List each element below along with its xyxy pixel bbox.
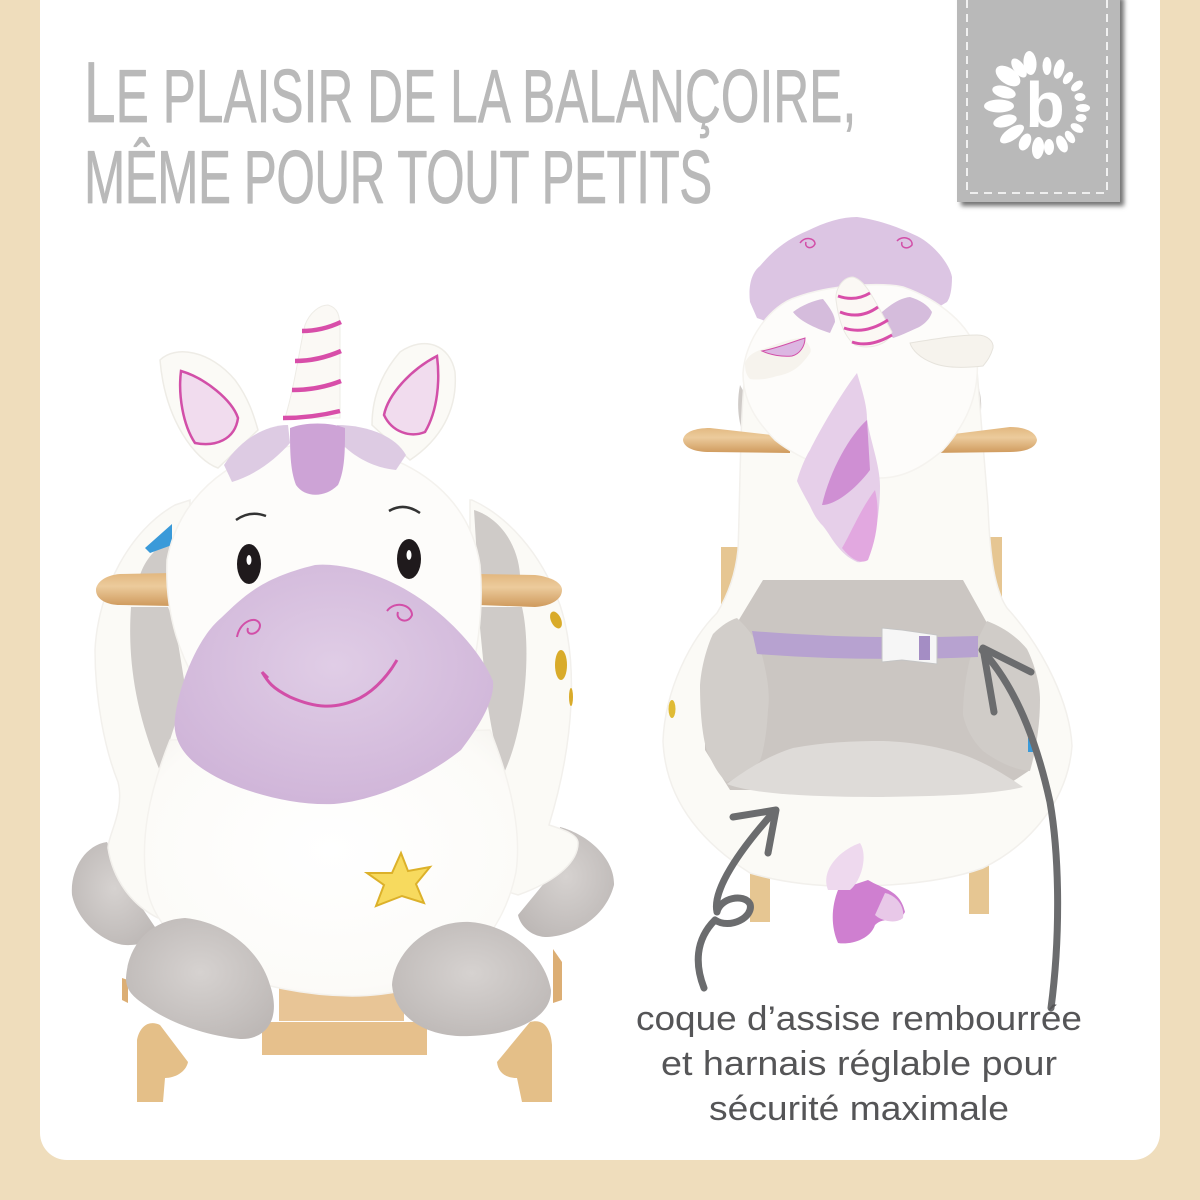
caption xyxy=(636,1000,1082,1128)
icon: flower logo xyxy=(984,50,1090,159)
yellow and blue spots xyxy=(668,700,1033,752)
inner seat grey xyxy=(130,510,526,775)
chair legs xyxy=(721,537,1002,922)
head xyxy=(167,445,481,680)
front feet xyxy=(126,918,551,1039)
forelock xyxy=(224,424,406,495)
harness xyxy=(752,628,978,664)
muzzle xyxy=(175,565,493,804)
illustration: back view unicorn xyxy=(663,217,1072,943)
horn xyxy=(283,305,341,418)
ears xyxy=(745,335,993,380)
illustration: front view unicorn xyxy=(72,305,614,1102)
inner seat xyxy=(700,580,1040,797)
ears xyxy=(160,344,455,468)
arrow: to harness xyxy=(982,648,1058,1008)
body xyxy=(144,730,518,996)
rocking base xyxy=(122,949,562,1102)
caption: sécurité maximale xyxy=(709,1090,1009,1128)
title xyxy=(84,45,856,220)
wooden handles xyxy=(96,573,562,607)
wooden handle xyxy=(683,427,1037,453)
title: LE PLAISIR DE LA BALANÇOIRE, xyxy=(84,45,856,141)
mane xyxy=(797,373,880,562)
logo tag xyxy=(957,0,1120,202)
star xyxy=(367,853,430,906)
caption: coque d’assise rembourrée xyxy=(636,1000,1082,1038)
tail xyxy=(826,843,905,943)
eyes xyxy=(236,507,421,584)
forelock xyxy=(793,297,932,338)
horn xyxy=(836,277,892,347)
yellow dots xyxy=(548,610,573,706)
grey behind head xyxy=(738,385,981,450)
blue tag xyxy=(145,524,172,553)
upside-down muzzle xyxy=(749,217,952,330)
arrow: to seat shell xyxy=(698,810,776,988)
back feet xyxy=(72,827,614,945)
back head xyxy=(743,285,978,478)
seat shell xyxy=(663,370,1072,886)
seat shell xyxy=(95,500,578,918)
title: MÊME POUR TOUT PETITS xyxy=(84,136,712,220)
caption: et harnais réglable pour xyxy=(661,1045,1057,1083)
icon: flower logo: b xyxy=(1025,69,1065,141)
